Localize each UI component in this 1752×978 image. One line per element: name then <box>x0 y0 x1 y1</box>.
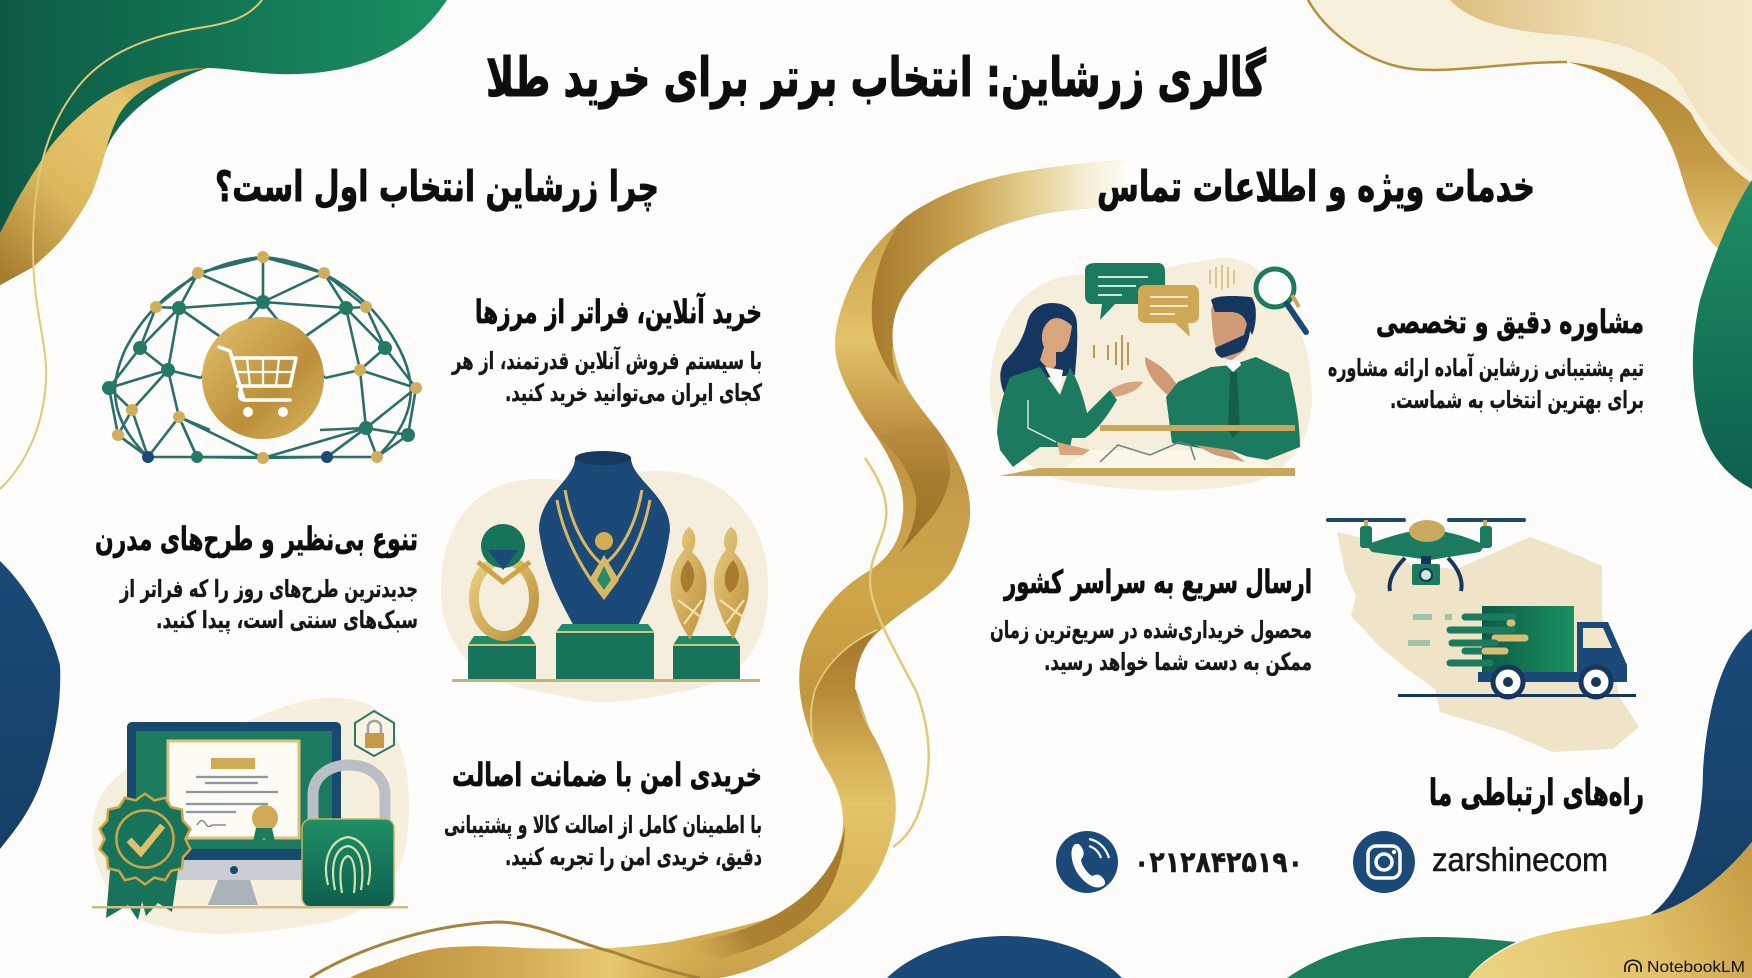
contact: instagram <box>1353 831 1608 893</box>
corner shape: top-left green wave with gold band <box>0 0 447 489</box>
body line 1: محصول خریداری‌شده در سریع‌ترین زمان <box>990 616 1312 644</box>
bottom wave: green <box>1287 937 1516 978</box>
icon: jewelry display <box>441 451 768 702</box>
block: fast delivery <box>990 563 1312 676</box>
icon: secure purchase, monitor certificate lock <box>92 698 409 934</box>
contact: phone <box>1056 831 1303 893</box>
corner shape: bottom-right navy and gold <box>1468 629 1752 978</box>
phone number: ۰۲۱۲۸۴۲۵۱۹۰ <box>1134 845 1303 879</box>
icon: phone <box>1056 831 1118 893</box>
heading: ارسال سریع به سراسر کشور <box>1003 563 1312 601</box>
instagram handle: zarshinecom <box>1432 841 1608 878</box>
title: گالری زرشاین: انتخاب برتر برای خرید طلا <box>486 46 1266 109</box>
bottom wave: navy <box>887 936 1122 978</box>
block: consultation <box>1328 303 1644 414</box>
block: secure purchase with authenticity <box>444 756 762 871</box>
body line 2: دقیق، خریدی امن را تجربه کنید. <box>505 843 762 871</box>
heading: مشاوره دقیق و تخصصی <box>1376 303 1644 341</box>
icon: consulting people at a table <box>990 258 1312 490</box>
icon: iran map with drone and delivery truck <box>1328 520 1639 752</box>
block: variety and modern designs <box>95 520 418 634</box>
corner shape: left navy wave <box>0 561 60 849</box>
body line 2: کجای ایران می‌توانید خرید کنید. <box>505 379 762 407</box>
watermark text: NotebookLM <box>1647 959 1745 976</box>
body line 1: با اطمینان کامل از اصالت کالا و پشتیبانی <box>444 811 762 839</box>
watermark: NotebookLM <box>1625 959 1745 976</box>
body line 2: سبک‌های سنتی است، پیدا کنید. <box>156 606 418 634</box>
icon: network dome with gold cart coin <box>102 251 422 464</box>
heading: why zarshine: چرا زرشاین انتخاب اول است؟ <box>215 162 659 212</box>
body line 2: ممکن به دست شما خواهد رسید. <box>1044 648 1312 676</box>
icon: notebooklm mark <box>1625 960 1641 972</box>
block: online purchase <box>451 292 762 407</box>
heading: خرید آنلاین، فراتر از مرزها <box>475 292 762 331</box>
heading: contact ways: راه‌های ارتباطی ما <box>1429 773 1644 814</box>
heading: تنوع بی‌نظیر و طرح‌های مدرن <box>95 520 418 558</box>
body line 1: با سیستم فروش آنلاین قدرتمند، از هر <box>451 346 762 375</box>
body line 1: جدیدترین طرح‌های روز را که فراتر از <box>119 575 418 603</box>
corner shape: top-right cream and gold <box>1308 0 1752 250</box>
heading: خریدی امن با ضمانت اصالت <box>452 756 762 794</box>
central gold ribbon <box>310 160 1125 978</box>
heading: services and contact: خدمات ویژه و اطلاعات تماس <box>1097 162 1535 212</box>
corner shape: right green wave <box>1693 180 1752 489</box>
icon: instagram <box>1353 831 1415 893</box>
